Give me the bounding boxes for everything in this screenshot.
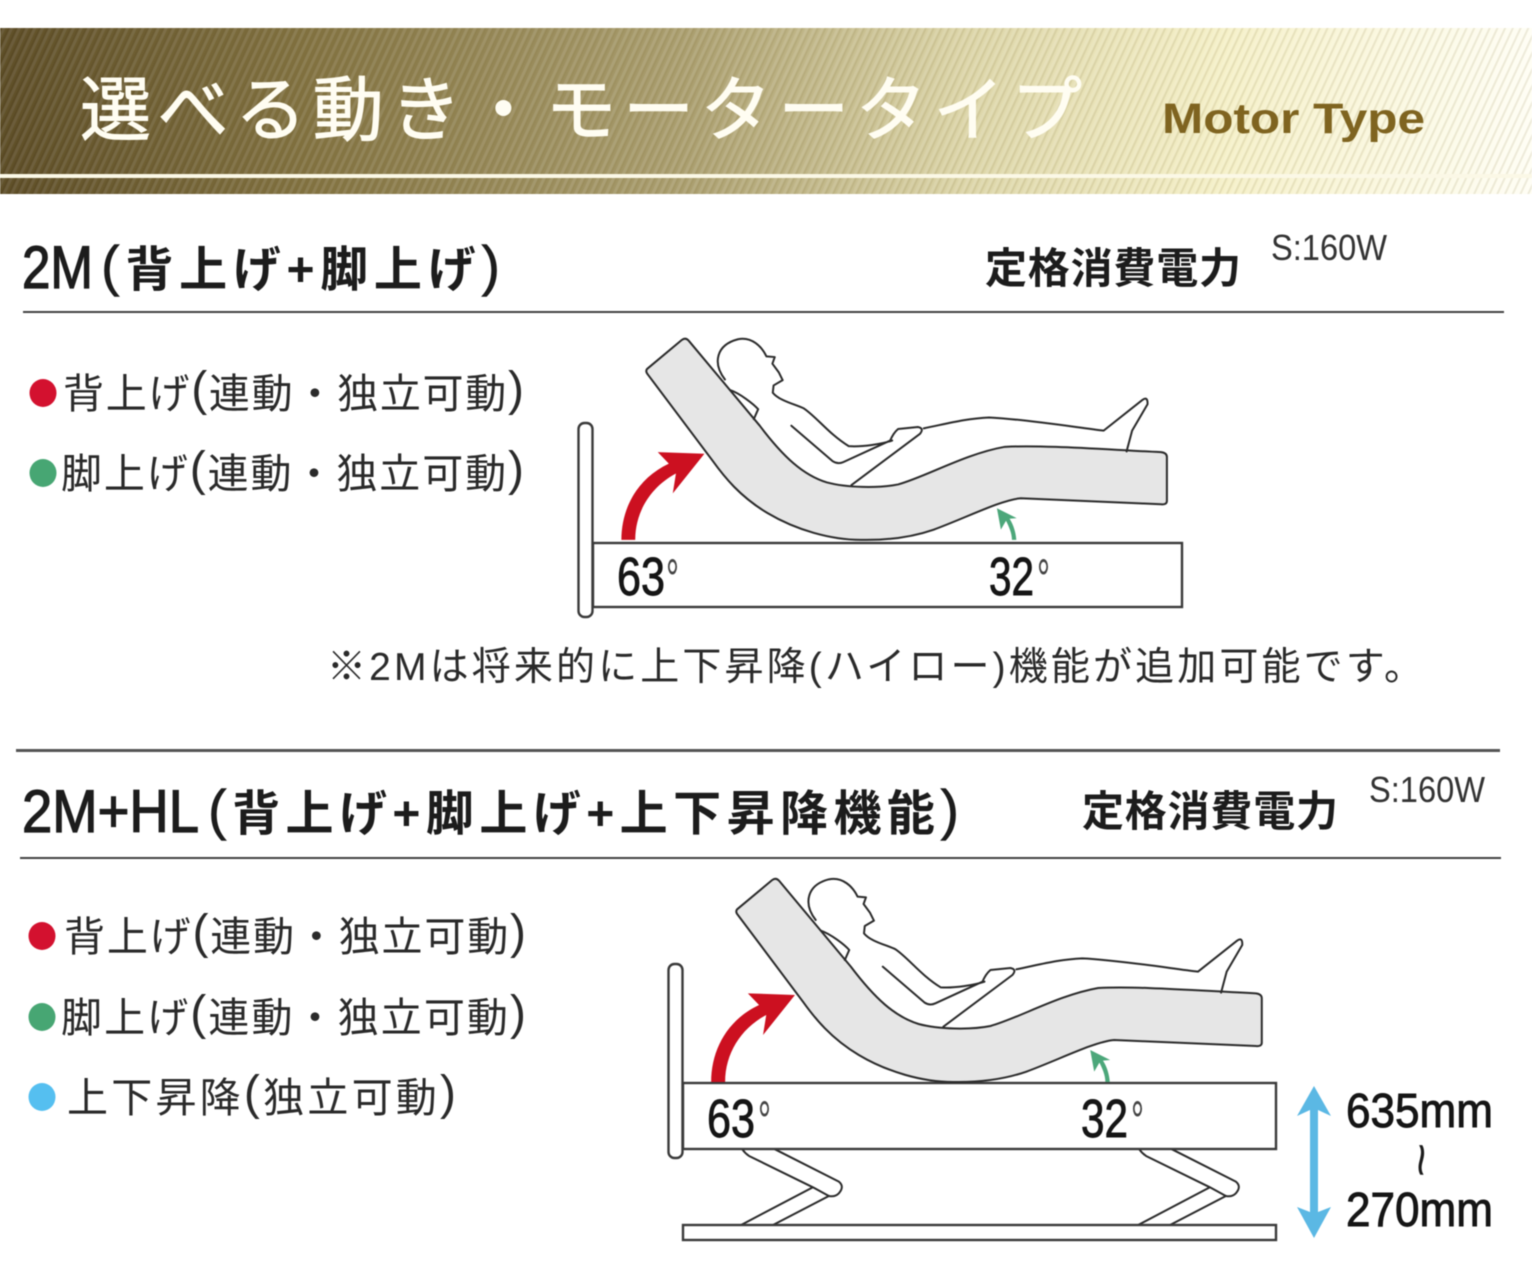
heading: 2M: 2M: [22, 234, 93, 301]
mattress: [646, 339, 1167, 540]
arrow: height range: [1297, 1086, 1331, 1238]
rated power: 2M+HL: S:160W: [1369, 769, 1485, 810]
angle: 63 degrees: 63: [617, 547, 665, 607]
angle: 32 degrees: 32: [989, 547, 1034, 607]
mattress: [736, 879, 1262, 1082]
height range labels: 635mm: [1346, 1085, 1493, 1138]
heading: 2M: [22, 234, 500, 301]
height range labels: ~: [1396, 1143, 1447, 1177]
angle: 63 degrees: °: [758, 1089, 771, 1152]
rated power: 2M: S:160W: [1271, 227, 1387, 268]
banner title: 選べる動き・モータータイプ: [80, 72, 1082, 151]
angle: 32 degrees: °: [1037, 547, 1050, 610]
legend item: leg lift: (: [190, 443, 206, 496]
height range labels: 270mm: [1346, 1184, 1493, 1237]
legend: 2M functions: [30, 363, 524, 497]
legend item: height adjust: (: [244, 1067, 260, 1120]
panel: 2M+HL: [20, 769, 1501, 1240]
legend item: leg lift: (: [190, 987, 206, 1040]
heading: 2M+HL: (: [208, 778, 227, 841]
heading: 2M: ): [481, 234, 500, 297]
person: [718, 339, 1148, 485]
banner header: [0, 28, 1532, 194]
heading: 2M: 背上げ+脚上げ: [125, 244, 476, 297]
heading: 2M+HL: [22, 778, 959, 845]
angle: 63 degrees: °: [666, 547, 679, 610]
legend item: back lift: ): [508, 363, 524, 416]
legend item: leg lift: 連動・独立可動: [208, 451, 506, 497]
legend item: leg lift: 連動・独立可動: [208, 995, 508, 1041]
legend item: leg lift: [30, 443, 524, 497]
legend item: leg lift: 脚上げ: [61, 451, 188, 497]
note: ※2Mは将来的に上下昇降(ハイロー)機能が追加可能です。: [327, 646, 1423, 689]
angle: 32 degrees: °: [1131, 1089, 1144, 1152]
legend item: leg lift: [28, 987, 526, 1041]
legend item: back lift: [30, 363, 524, 417]
angle: 63 degrees: 63: [707, 1089, 755, 1149]
legend item: back lift: ): [510, 906, 526, 959]
diagram: 2M+HL bed: [668, 879, 1276, 1240]
scissor legs: [741, 1149, 1239, 1225]
legend item: height adjust: 上下昇降: [67, 1075, 241, 1121]
arrow: back lift: [711, 993, 795, 1082]
legend item: height adjust: 独立可動: [263, 1075, 437, 1121]
heading: 2M+HL: ): [940, 778, 959, 841]
legend item: back lift: [28, 906, 526, 960]
legend item: height adjust: ): [440, 1067, 456, 1120]
rated power: 2M: 定格消費電力: [985, 245, 1241, 292]
height range labels: [1346, 1085, 1493, 1237]
legend item: back lift: (: [191, 363, 207, 416]
heading: 2M+HL: 2M+HL: [22, 778, 199, 845]
arrow: back lift: [621, 452, 704, 540]
legend item: back lift: 背上げ: [63, 371, 189, 417]
legend item: leg lift: ): [508, 443, 524, 496]
diagram: 2M bed: [578, 339, 1182, 617]
legend: 2M+HL functions: [28, 906, 526, 1121]
legend item: leg lift: ): [510, 987, 526, 1040]
heading: 2M: (: [101, 234, 120, 297]
legend item: height adjust: [28, 1067, 456, 1121]
legend item: leg lift: 脚上げ: [61, 995, 188, 1041]
rated power: 2M+HL: 定格消費電力: [1082, 788, 1338, 835]
rated power: 2M+HL: [1082, 769, 1485, 835]
arrow: leg lift: [997, 508, 1017, 540]
legend item: back lift: (: [192, 906, 208, 959]
rated power: 2M: [985, 227, 1387, 292]
banner subtitle: Motor Type: [1162, 95, 1425, 143]
person: [808, 879, 1242, 1027]
legend item: back lift: 連動・独立可動: [209, 371, 506, 417]
arrow: leg lift: [1090, 1050, 1110, 1082]
heading: 2M+HL: 背上げ+脚上げ+上下昇降機能: [232, 788, 935, 841]
angle: 32 degrees: 32: [1081, 1089, 1128, 1149]
panel: 2M: [22, 227, 1504, 689]
legend item: back lift: 連動・独立可動: [210, 914, 508, 960]
legend item: back lift: 背上げ: [64, 914, 191, 960]
